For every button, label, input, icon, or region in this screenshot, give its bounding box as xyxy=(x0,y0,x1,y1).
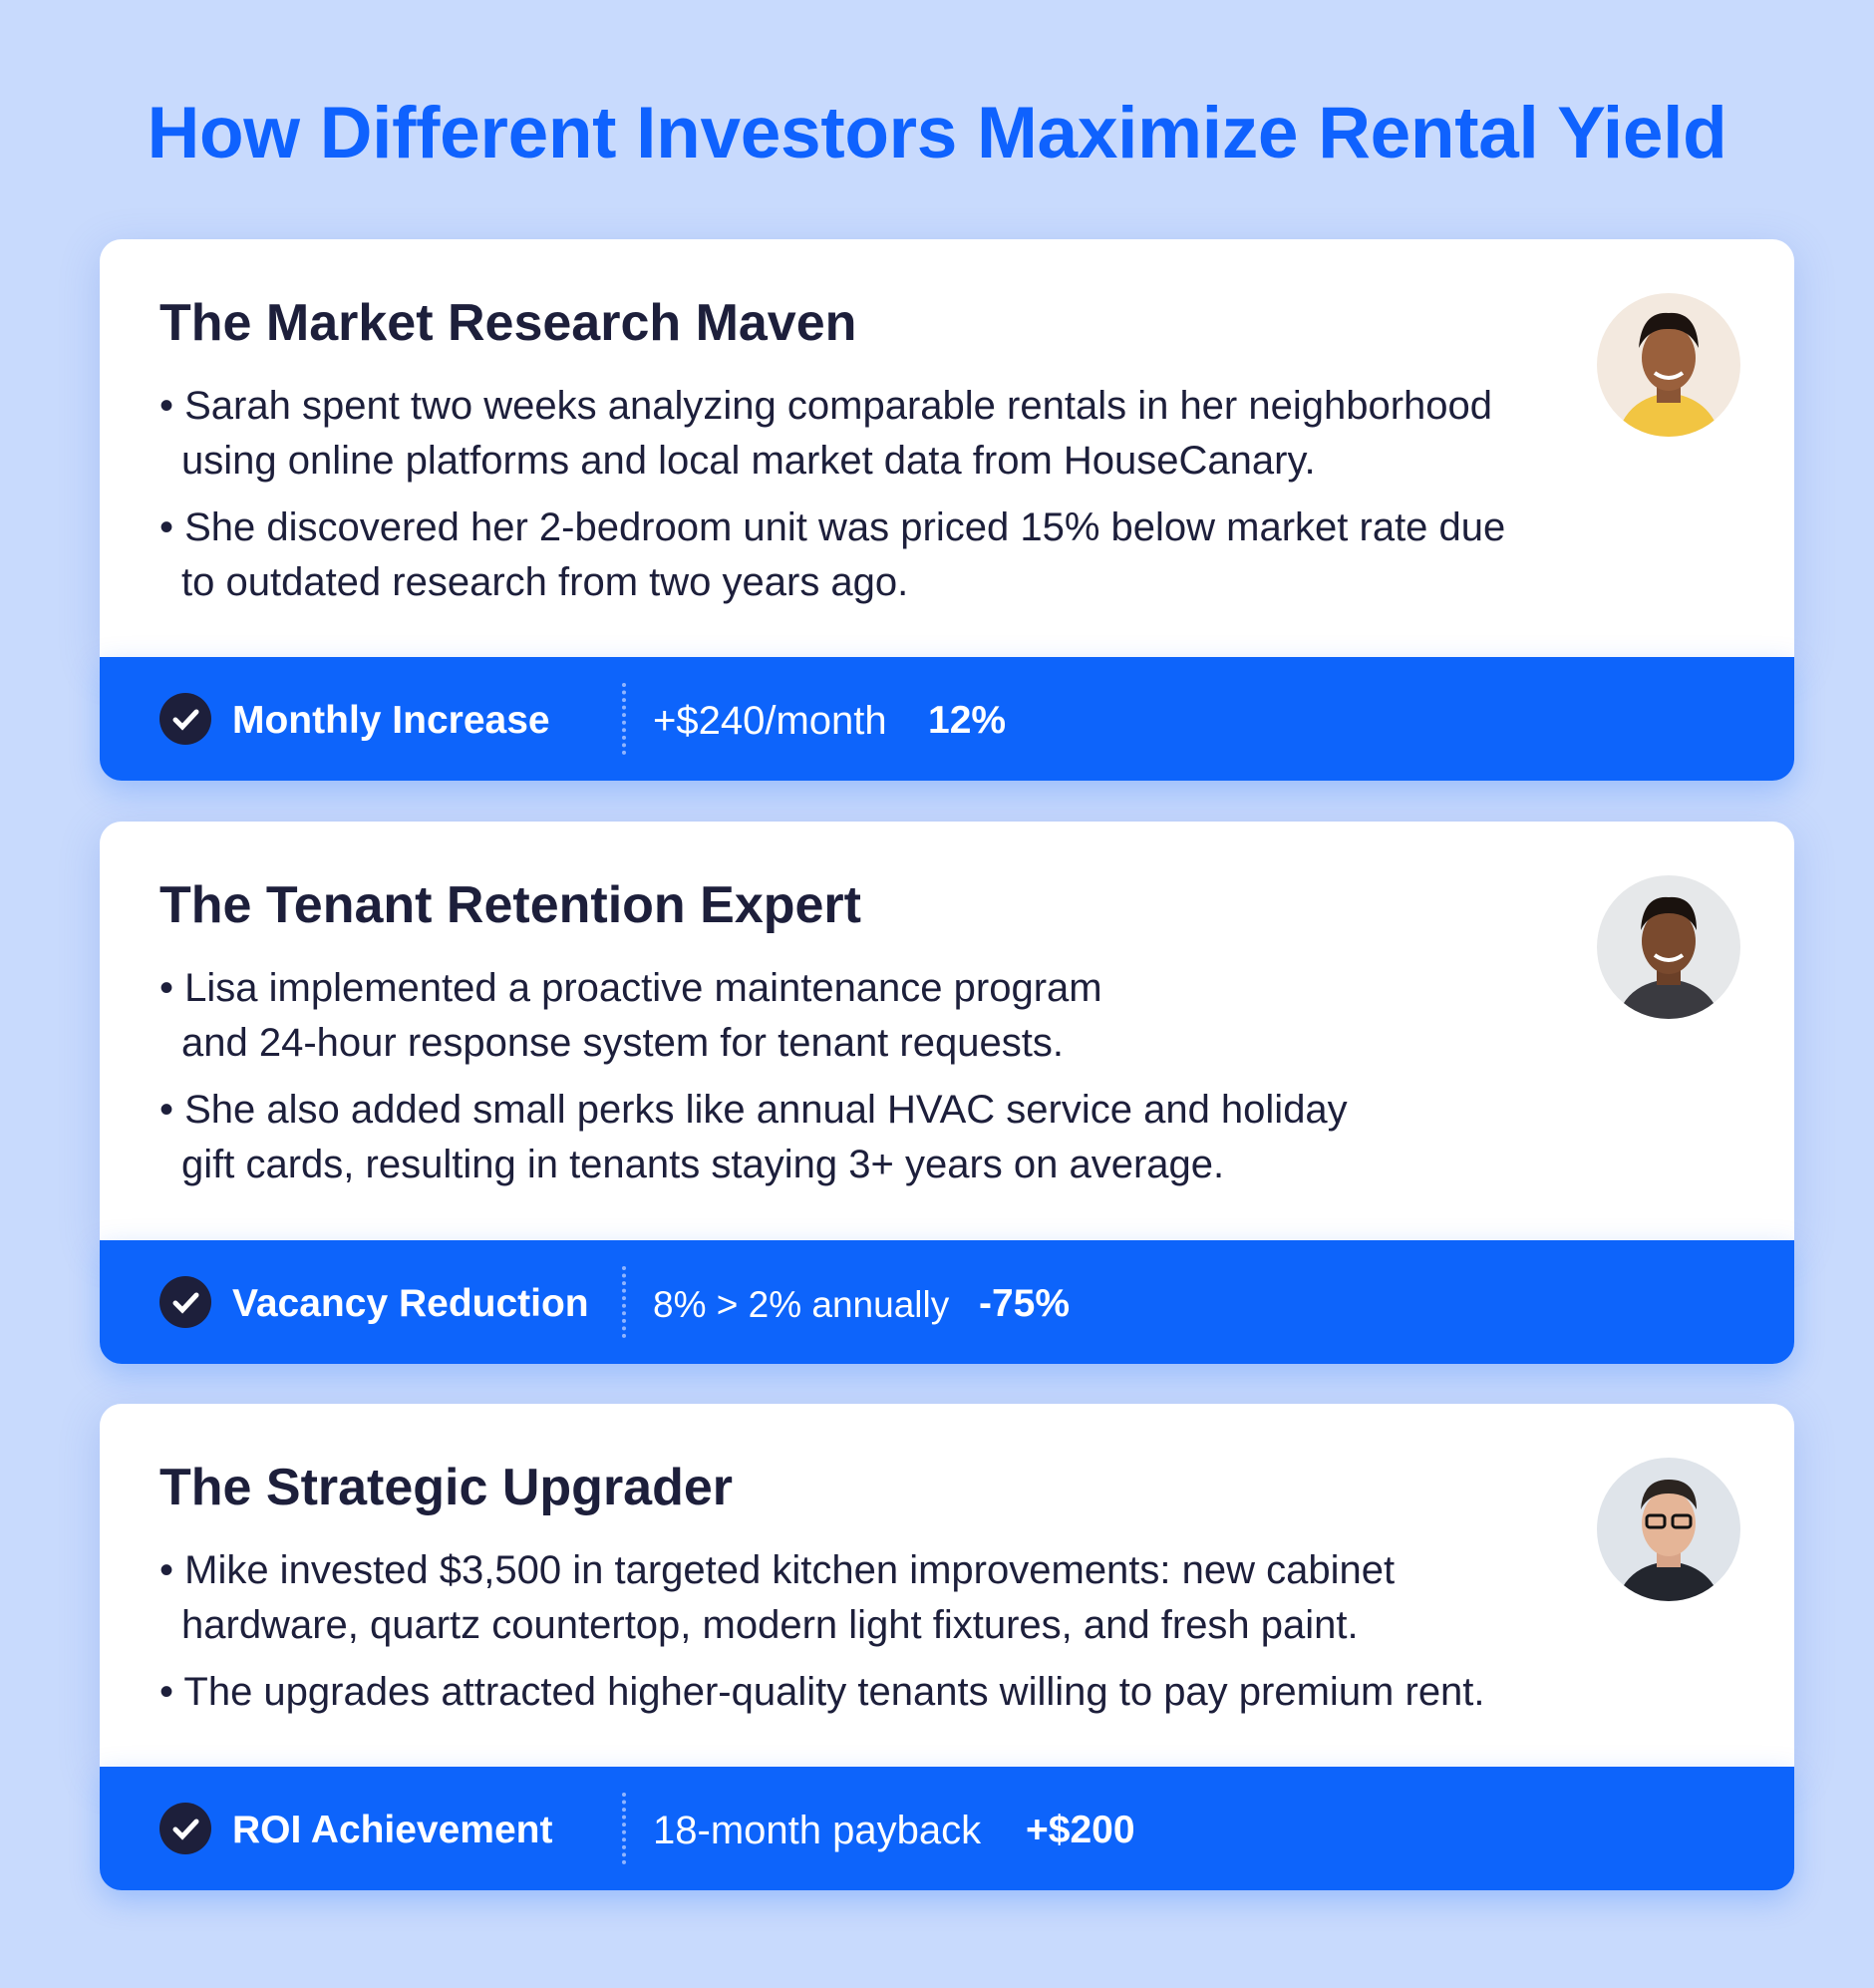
label: ROI Achievement xyxy=(232,1809,552,1851)
title: How Different Investors Maximize Rental Yield xyxy=(148,93,1726,173)
icon: avatar Mike xyxy=(1597,1458,1740,1601)
label: Monthly Increase xyxy=(232,699,550,742)
percentage: -75% xyxy=(979,1282,1070,1325)
heading: The Strategic Upgrader xyxy=(159,1459,733,1516)
bullet 1 xyxy=(159,1548,1395,1647)
bullet 2: to outdated research from two years ago. xyxy=(181,560,908,604)
icon: check xyxy=(159,1276,211,1328)
amount: +$200 xyxy=(1026,1809,1135,1851)
value: +$240/month xyxy=(653,699,887,743)
result bar: vacancy reduction xyxy=(100,1240,1794,1364)
bullet 1: and 24-hour response system for tenant requests. xyxy=(181,1021,1064,1065)
bullet 2 xyxy=(159,1088,1348,1186)
bullet 2: • She discovered her 2-bedroom unit was priced 15% below market rate due xyxy=(159,505,1505,549)
icon: check xyxy=(159,1803,211,1854)
panel: market research maven xyxy=(100,239,1794,657)
panel: strategic upgrader xyxy=(100,1404,1794,1767)
heading: The Tenant Retention Expert xyxy=(159,876,861,934)
value: 18-month payback xyxy=(653,1809,981,1852)
heading: The Market Research Maven xyxy=(159,294,856,352)
bullet 1 xyxy=(159,966,1102,1065)
percentage: 12% xyxy=(928,699,1006,742)
value: 8% > 2% annually xyxy=(653,1284,949,1325)
bullet 2: gift cards, resulting in tenants staying 3+ years on average. xyxy=(181,1143,1224,1186)
panel: tenant retention expert xyxy=(100,822,1794,1240)
bullet 1: • Sarah spent two weeks analyzing comparable rentals in her neighborhood xyxy=(159,384,1492,428)
icon: check xyxy=(159,693,211,745)
bullet 2 xyxy=(159,505,1505,604)
result bar: monthly increase xyxy=(100,657,1794,781)
bullet 1 xyxy=(159,384,1492,483)
result bar: ROI achievement xyxy=(100,1767,1794,1890)
bullet 1: hardware, quartz countertop, modern light fixtures, and fresh paint. xyxy=(181,1603,1359,1647)
bullet 2: • The upgrades attracted higher-quality tenants willing to pay premium rent. xyxy=(159,1670,1485,1714)
icon: avatar Lisa xyxy=(1597,875,1740,1019)
bullet 2: • She also added small perks like annual HVAC service and holiday xyxy=(159,1088,1348,1132)
bullet 1: • Mike invested $3,500 in targeted kitchen improvements: new cabinet xyxy=(159,1548,1395,1592)
icon: avatar Sarah xyxy=(1597,293,1740,437)
bullet 1: • Lisa implemented a proactive maintenance program xyxy=(159,966,1102,1010)
bullet 1: using online platforms and local market data from HouseCanary. xyxy=(181,439,1316,483)
label: Vacancy Reduction xyxy=(232,1282,589,1325)
